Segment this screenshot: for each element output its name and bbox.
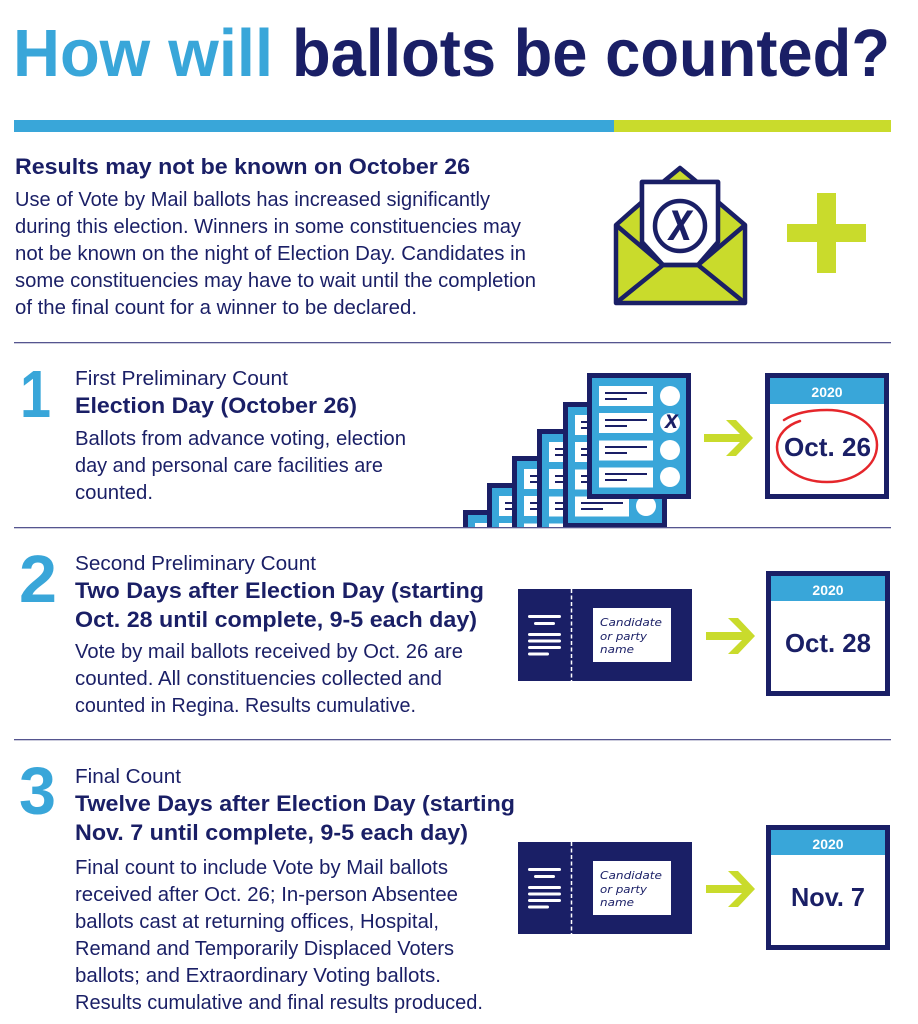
- icon: absentee ballot: [518, 842, 692, 934]
- intro body: Use of Vote by Mail ballots has increased significantly: [15, 189, 490, 211]
- step 3 body: ballots cast at returning offices, Hospital,: [75, 911, 439, 933]
- icon: mail-in ballot: [518, 589, 692, 681]
- intro body: some constituencies may have to wait until the completion: [15, 270, 536, 292]
- intro body: [15, 189, 536, 319]
- calendar: Oct. 28: [768, 574, 888, 694]
- step 3 heading: [75, 791, 515, 845]
- arrow: [706, 871, 755, 907]
- title: [13, 16, 890, 91]
- intro heading: Results may not be known on October 26: [15, 154, 470, 179]
- step 2 label: Second Preliminary Count: [75, 553, 316, 575]
- icon: mail-in ballot: Candidate: [600, 617, 662, 629]
- icon: absentee ballot: name: [600, 897, 634, 909]
- icon: absentee ballot: or party: [600, 884, 648, 896]
- step 1 body: [75, 428, 406, 504]
- icon: absentee ballot: Candidate: [600, 870, 662, 882]
- step 2: second preliminary count: [19, 542, 888, 717]
- icon: stack of ballots: [463, 373, 691, 527]
- step 2 body: Vote by mail ballots received by Oct. 26 are: [75, 641, 463, 663]
- step 3 body: Final count to include Vote by Mail ballots: [75, 857, 448, 879]
- icon: stack of ballots: x: [663, 406, 679, 434]
- calendar: Oct. 28: Oct. 28: [785, 628, 871, 658]
- title: ballots be counted?: [292, 16, 890, 91]
- arrow: [706, 618, 755, 654]
- step 3 label: Final Count: [75, 766, 181, 788]
- step 1 label: First Preliminary Count: [75, 368, 288, 390]
- step number 3: 3: [19, 754, 56, 829]
- step 1 body: counted.: [75, 482, 153, 504]
- calendar: Oct. 26: Oct. 26: [784, 432, 871, 462]
- icon: envelope with ballot: x: [667, 189, 694, 252]
- calendar: Oct. 28: 2020: [812, 582, 844, 598]
- intro body: of the final count for a winner to be declared.: [15, 297, 417, 319]
- divider: [14, 527, 891, 528]
- step 2 heading: [75, 578, 484, 632]
- divider: [14, 739, 891, 740]
- step 3 body: received after Oct. 26; In-person Absentee: [75, 884, 458, 906]
- step 1 body: Ballots from advance voting, election: [75, 428, 406, 450]
- calendar: Oct. 26: 2020: [811, 384, 843, 400]
- icon: mail-in ballot: name: [600, 644, 634, 656]
- calendar: Oct. 26: [768, 376, 886, 496]
- step 2 heading: Oct. 28 until complete, 9-5 each day): [75, 607, 477, 632]
- step 3 body: [75, 857, 483, 1014]
- step 2 heading: Two Days after Election Day (starting: [75, 578, 484, 603]
- step 2 body: counted in Regina. Results cumulative.: [75, 695, 416, 717]
- step 3 body: ballots; and Extraordinary Voting ballots.: [75, 965, 441, 987]
- title: How will: [13, 16, 273, 91]
- divider: [14, 342, 891, 343]
- intro body: during this election. Winners in some constituencies may: [15, 216, 521, 238]
- step number 1: 1: [20, 357, 51, 432]
- step 2 body: counted. All constituencies collected and: [75, 668, 442, 690]
- intro body: not be known on the night of Election Day. Candidates in: [15, 243, 526, 265]
- step 3 body: Results cumulative and final results produced.: [75, 992, 483, 1014]
- calendar: Nov. 7: [768, 828, 888, 948]
- icon: envelope with ballot: [616, 168, 745, 303]
- icon: plus sign: [787, 193, 866, 273]
- step 3: final count: [19, 754, 888, 1014]
- calendar: Nov. 7: 2020: [812, 836, 844, 852]
- icon: mail-in ballot: or party: [600, 631, 648, 643]
- step 2 body: [75, 641, 463, 717]
- step 1 heading: Election Day (October 26): [75, 393, 357, 418]
- calendar: Nov. 7: Nov. 7: [791, 882, 865, 912]
- step 3 heading: Twelve Days after Election Day (starting: [75, 791, 515, 816]
- step 1: first preliminary count: [24, 370, 889, 527]
- step 1 body: day and personal care facilities are: [75, 455, 383, 477]
- step 3 body: Remand and Temporarily Displaced Voters: [75, 938, 454, 960]
- step 3 heading: Nov. 7 until complete, 9-5 each day): [75, 820, 468, 845]
- intro text block: [15, 154, 536, 319]
- arrow: [704, 420, 753, 456]
- step number 2: 2: [19, 542, 57, 617]
- title rule: [14, 120, 891, 132]
